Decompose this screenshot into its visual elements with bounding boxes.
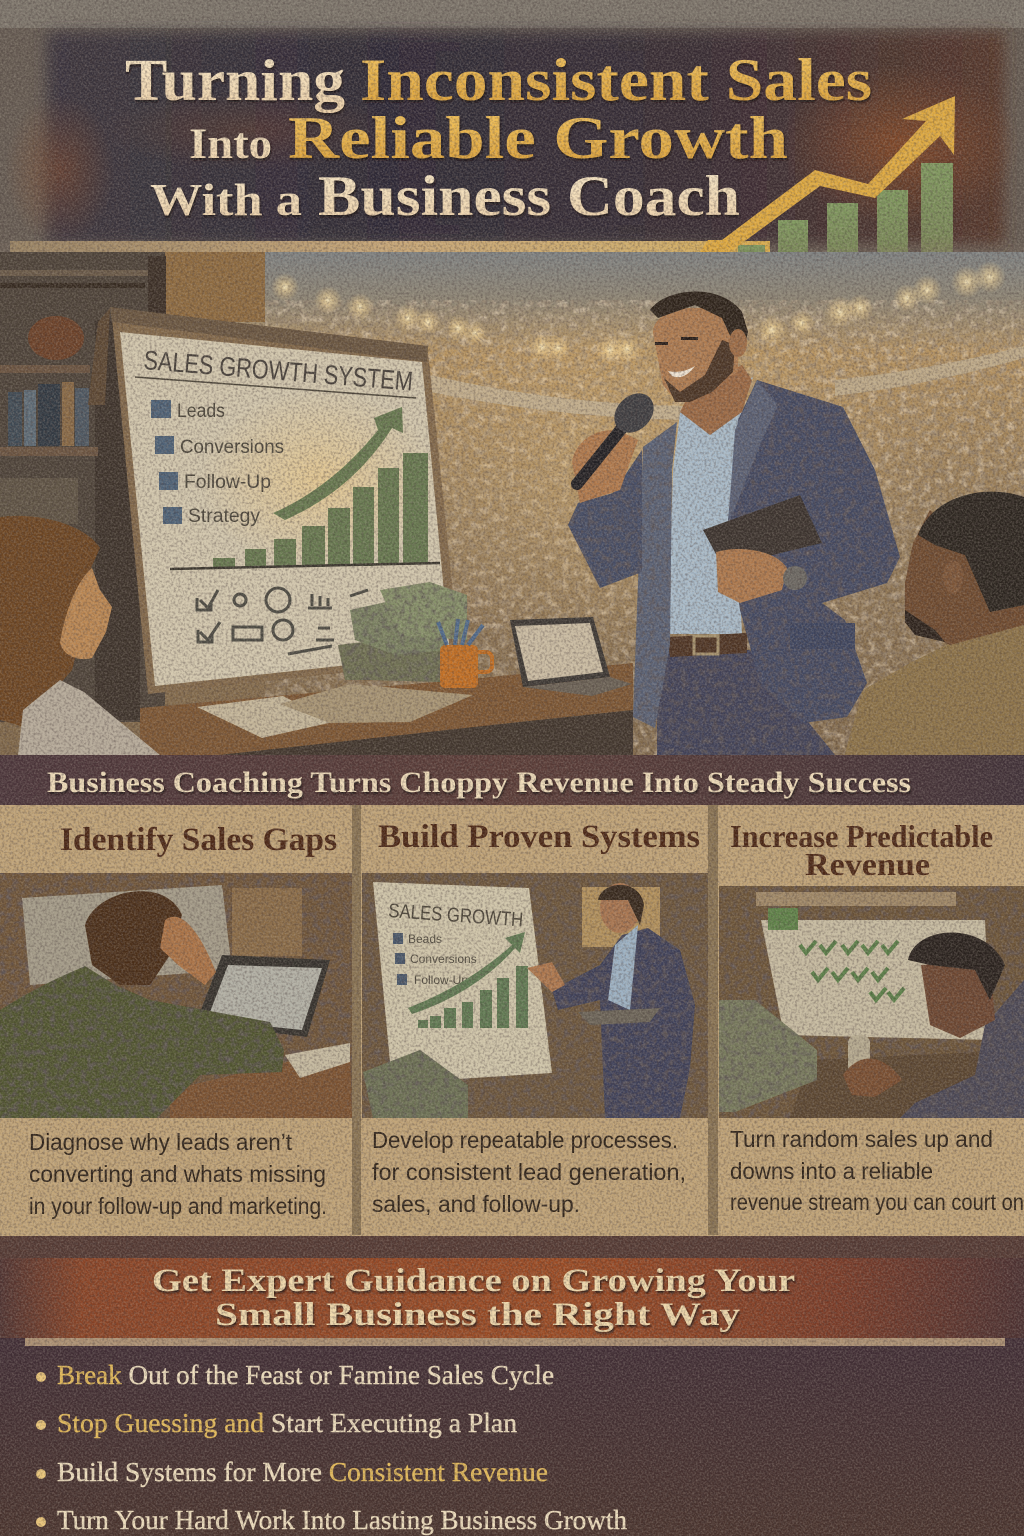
- scene backdrop: [0, 252, 1024, 755]
- left jacket panel: [633, 422, 677, 728]
- string lights: [271, 261, 1006, 365]
- call to action heading: Small Business the Right Way: [215, 1297, 741, 1333]
- transition strip: [0, 1236, 1024, 1260]
- illustration: coach at chart: Conversions: [410, 952, 477, 966]
- ear: [729, 329, 747, 357]
- description: Turn random sales up and: [730, 1126, 993, 1152]
- eyes: [655, 337, 698, 345]
- panel: three columns: [0, 805, 1024, 1237]
- microphone: [577, 385, 662, 484]
- woman in audience: [0, 516, 160, 755]
- title heading: Into: [189, 121, 272, 168]
- chart bars and arrow: [213, 407, 428, 568]
- hair: [650, 291, 748, 345]
- description: [372, 1127, 686, 1217]
- desk: [140, 663, 633, 760]
- title heading: Turning: [125, 47, 345, 113]
- description: [730, 1126, 1024, 1215]
- laptop: [510, 617, 632, 696]
- wristwatch: [783, 566, 807, 590]
- description: Develop repeatable processes.: [372, 1127, 678, 1153]
- call to action heading: [152, 1263, 795, 1333]
- pocket: [790, 623, 855, 649]
- heading: Build Proven Systems: [378, 819, 700, 855]
- parchment: [0, 805, 1024, 1237]
- column 3: increase predictable revenue: [719, 818, 1024, 1215]
- column 2: build proven systems: [362, 819, 708, 1217]
- checklist: Follow-Up: [184, 472, 271, 493]
- chart: growth bars: [738, 163, 953, 267]
- money stacks: [338, 582, 467, 682]
- heading: Increase Predictable: [730, 818, 993, 854]
- icon: orange mug: [438, 619, 492, 688]
- right jacket panel: [728, 380, 900, 723]
- bullet 1: Break Out of the Feast or Famine Sales Cycle: [57, 1360, 554, 1390]
- paper: [197, 696, 333, 738]
- bookcase and wall: [0, 252, 166, 722]
- description: Diagnose why leads aren’t: [29, 1129, 293, 1155]
- checklist: Strategy: [188, 506, 261, 527]
- checklist: [151, 400, 284, 527]
- smile: [668, 366, 695, 377]
- panel: benefits list: [0, 1338, 1024, 1536]
- banner: subtitle: [0, 755, 1024, 805]
- small icons row: [197, 588, 368, 654]
- balcony rails: [430, 375, 690, 420]
- panel: title banner: [0, 28, 1024, 267]
- illustration: coach at chart: Follow-Up: [414, 973, 468, 987]
- bullet 2: Stop Guessing and Start Executing a Plan: [57, 1408, 518, 1438]
- bullet 3: Build Systems for More Consistent Revenue: [57, 1457, 548, 1487]
- description: for consistent lead generation,: [372, 1159, 686, 1185]
- bullet 4: Turn Your Hard Work Into Lasting Business Growth: [57, 1505, 627, 1535]
- notebook: [703, 495, 822, 567]
- illustration: coach at chart: [362, 873, 708, 1118]
- divider rule: [10, 241, 770, 253]
- checklist: Conversions: [180, 437, 284, 458]
- neck: [680, 365, 752, 435]
- illustration: coach at chart: SALES GROWTH: [388, 900, 524, 931]
- flip chart: sales growth system: [88, 307, 460, 694]
- hand holding microphone: [572, 430, 638, 503]
- lapel: [728, 380, 778, 525]
- illustration: calendar and cash: [719, 886, 1024, 1118]
- books: [8, 382, 89, 446]
- description: downs into a reliable: [730, 1158, 933, 1184]
- subtitle text: Business Coaching Turns Choppy Revenue Into Steady Success: [47, 766, 911, 799]
- coach figure: [568, 291, 900, 755]
- checklist: Leads: [177, 401, 225, 422]
- top rail: [110, 307, 428, 362]
- open book: [280, 684, 473, 723]
- call to action heading: Get Expert Guidance on Growing Your: [152, 1263, 795, 1299]
- man in audience: [843, 492, 1024, 760]
- description: sales, and follow-up.: [372, 1191, 580, 1217]
- heading: Identify Sales Gaps: [60, 822, 337, 858]
- heading: Revenue: [805, 846, 930, 882]
- banner: call to action: [0, 1258, 1024, 1338]
- title heading: Reliable Growth: [288, 105, 788, 171]
- heading: [730, 818, 993, 882]
- column dividers: [352, 805, 718, 1235]
- title heading: [125, 47, 872, 228]
- beard: [664, 340, 735, 402]
- shirt: [668, 377, 753, 634]
- lower hand: [716, 549, 787, 603]
- description: [29, 1129, 327, 1219]
- illustration: coach at chart: Beads: [408, 932, 442, 946]
- illustration: stressed owner: [0, 873, 352, 1118]
- title heading: Inconsistent Sales: [360, 47, 872, 113]
- title heading: With a: [150, 174, 302, 225]
- icon: rising arrow: [700, 96, 955, 252]
- description: in your follow-up and marketing.: [29, 1193, 327, 1219]
- column 1: identify sales gaps: [0, 822, 352, 1219]
- stadium crowd: [165, 252, 1024, 755]
- left sleeve: [568, 450, 642, 588]
- belt: [667, 633, 747, 657]
- trousers: [657, 650, 835, 755]
- chart title: SALES GROWTH SYSTEM: [143, 345, 414, 397]
- title heading: Business Coach: [318, 165, 740, 228]
- icon: globe: [28, 316, 84, 360]
- illustration: coach presenting: [0, 252, 1024, 760]
- top grey strip: [0, 0, 1024, 30]
- description: converting and whats missing: [29, 1161, 326, 1187]
- face: [653, 308, 738, 402]
- divider: [25, 1338, 1005, 1346]
